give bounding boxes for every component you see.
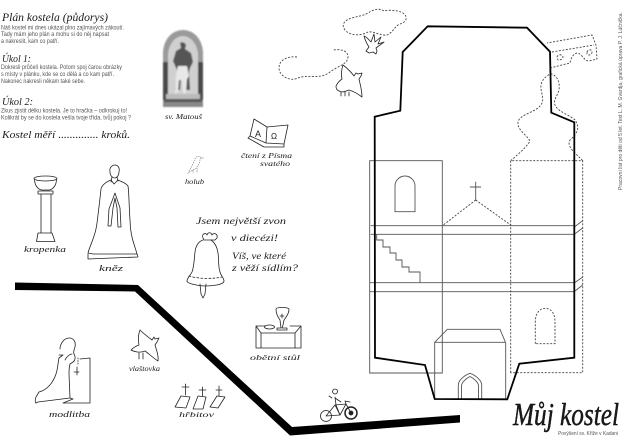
icon: graves with crosses xyxy=(175,384,225,409)
text block: task 1 xyxy=(1,63,122,85)
label: reading from scripture: čtení z Písma xyxy=(241,151,292,160)
label: holy water font: kropenka xyxy=(24,245,66,254)
callout: biggest bell: z věží sídlím? xyxy=(231,263,299,273)
text block: task 2: Kolikrát by se do kostela vešla tvoje třída, tvůj pokoj ? xyxy=(1,114,131,122)
handwritten measurement line: Kostel měří .............. kroků. xyxy=(1,130,130,141)
icon: faint pigeon xyxy=(188,156,203,173)
side credit: Pracovní list pro děti od 5 let. Text L. M. Gvardja, grafická úprava P. J. Lúčnička. xyxy=(618,12,624,190)
photo: statue in niche xyxy=(163,30,203,107)
ticks xyxy=(574,221,583,292)
label: altar: obětní stůl xyxy=(250,353,300,362)
icon: bell xyxy=(187,233,224,298)
portal xyxy=(435,329,506,399)
text block: task 1: s místy v plánku, kde se co dělá a co kam patří. xyxy=(1,71,114,78)
heading: task 2: Úkol 2: xyxy=(2,96,33,108)
callout: biggest bell: v diecézi! xyxy=(231,233,278,243)
icon: praying figure xyxy=(35,338,90,403)
thought cloud top xyxy=(343,9,406,35)
church plan: thin inner structure xyxy=(370,161,583,399)
subtitle: Povýšení sv. Kříže v Kadani xyxy=(558,431,618,437)
text block: intro: Tady mám jeho plán a mohu si do něj napsat xyxy=(1,31,109,38)
window xyxy=(395,176,415,212)
church outline: thick xyxy=(375,26,574,399)
icon: priest xyxy=(88,165,138,259)
icon: dove upper xyxy=(364,34,384,54)
cross xyxy=(470,182,481,200)
heading: plan of the church: Plán kostela (půdorys) xyxy=(1,11,108,24)
label: prayer: modlitba xyxy=(49,410,90,419)
callout: biggest bell: Víš, ve které xyxy=(232,251,287,261)
icon: bird lower xyxy=(336,65,362,97)
icon: cyclist xyxy=(320,389,357,422)
label: pigeon: holub xyxy=(185,177,204,186)
road: thick black road xyxy=(15,282,460,436)
label: priest: kněz xyxy=(99,264,124,273)
icon: open book xyxy=(248,119,288,147)
bands across nave xyxy=(370,226,574,292)
heading: task 1: Úkol 1: xyxy=(2,53,31,65)
icon: open book: Ω xyxy=(271,132,277,141)
text block: intro xyxy=(1,24,124,45)
label: cemetery: hřbitov xyxy=(179,411,216,419)
label: reading from scripture: svatého xyxy=(260,159,290,168)
door xyxy=(458,373,482,399)
icon: altar with chalice xyxy=(256,308,301,348)
label: reading from scripture xyxy=(241,151,292,168)
text block: intro: Náš kostel mi dnes ukázal plno zajímavých zákoutí. xyxy=(1,24,124,32)
thought cloud left xyxy=(279,50,348,79)
label: swallow: vlaštovka xyxy=(129,365,161,373)
text block: intro: a nakreslit, kam co patří. xyxy=(1,38,59,45)
icon: holy water font xyxy=(34,176,57,242)
left tower xyxy=(370,161,442,373)
icon: swallow xyxy=(131,330,159,361)
callout: biggest bell: Jsem největší zvon xyxy=(196,216,287,226)
text block: task 2: Zkus zjistit délku kostela. Je to hračka – odkrokuj to! xyxy=(1,108,127,114)
text block: task 2 xyxy=(1,108,131,122)
text block: task 1: Nakonec nakresli někam také sebe. xyxy=(1,78,85,85)
callout: biggest bell xyxy=(196,216,299,273)
label: saint Matthew: sv. Matouš xyxy=(165,112,203,121)
stairs xyxy=(377,234,420,283)
icon: open book: A xyxy=(255,129,261,139)
text block: task 1: Dokresli průčelí kostela. Potom spoj čarou obrázky xyxy=(1,63,122,71)
church plan: dashed elements xyxy=(443,35,597,373)
